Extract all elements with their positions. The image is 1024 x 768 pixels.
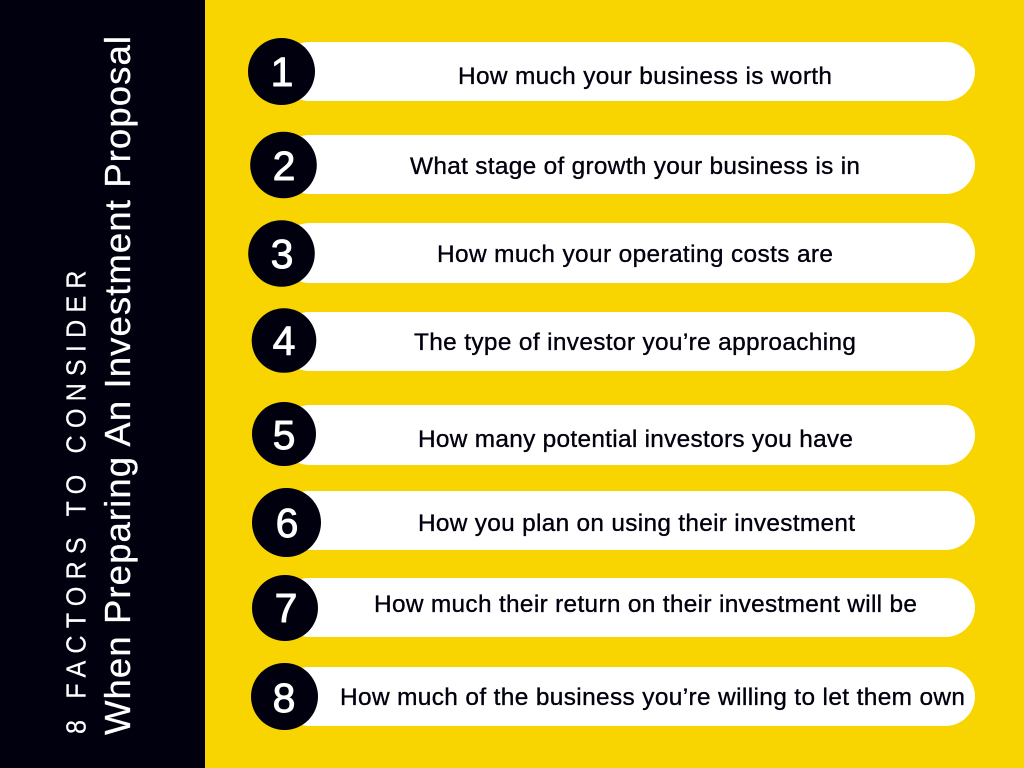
factor 8 [251,663,975,730]
factor 6: How you plan on using their investment [418,510,855,537]
factor 3 [248,220,975,287]
title: When Preparing An Investment Proposal [97,36,138,735]
factor 3: How much your operating costs are [437,241,833,268]
factor 2: 2 [273,143,295,189]
factor 7 [252,575,975,641]
factor 1: How much your business is worth [458,63,832,90]
factor 5 [252,402,975,466]
factor 7: How much their return on their investment will be [374,591,917,618]
factor 8: How much of the business you’re willing to let them own [340,684,965,711]
factor 1: 1 [271,49,293,95]
factor 8: 8 [273,675,295,721]
factor 2: What stage of growth your business is in [410,153,860,180]
factor 6: 6 [276,500,298,546]
factor 2 [250,132,975,198]
factor 4: 4 [273,318,295,364]
factor 3: 3 [271,231,293,277]
factor 6 [252,488,975,557]
subtitle: 8 FACTORS TO CONSIDER [60,270,92,734]
factor 1 [248,38,975,105]
factor 4: The type of investor you’re approaching [414,329,856,356]
panel: sidebar [0,0,205,768]
factor 4 [252,308,975,373]
factor 5: How many potential investors you have [418,426,853,453]
factor 7: 7 [275,585,297,631]
factor 5: 5 [273,412,295,458]
